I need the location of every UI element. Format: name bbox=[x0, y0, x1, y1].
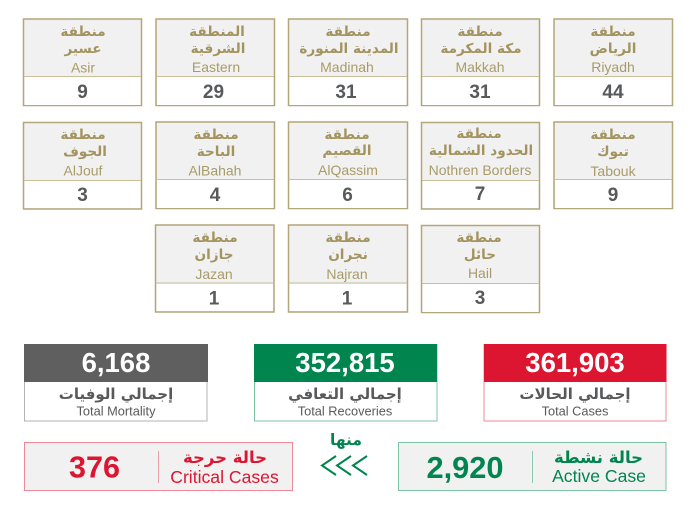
card: Makkah: Makkah bbox=[455, 59, 505, 75]
card: Tabouk bbox=[554, 122, 672, 208]
card: Makkah: مكة المكرمة bbox=[440, 41, 522, 57]
card: Tabouk: Tabouk bbox=[590, 163, 637, 179]
card: Madinah: 31 bbox=[335, 82, 357, 103]
card: Madinah: المدينة المنورة bbox=[299, 41, 399, 57]
card: AlQassim: القصيم bbox=[322, 143, 372, 159]
card: Jazan: 1 bbox=[209, 288, 220, 310]
card: Madinah bbox=[288, 19, 408, 106]
panel: total mortality: Total Mortality bbox=[77, 404, 156, 418]
card: Tabouk: منطقة bbox=[590, 127, 636, 143]
card: Riyadh: 44 bbox=[602, 82, 624, 103]
card: AlQassim: 6 bbox=[342, 185, 353, 206]
card: Asir: 9 bbox=[77, 82, 88, 103]
card: Jazan: Jazan bbox=[195, 266, 233, 282]
card: Hail: منطقة bbox=[456, 230, 502, 246]
card: Nothren Borders: Nothren Borders bbox=[429, 162, 531, 178]
card: Asir: عسير bbox=[63, 41, 102, 57]
panel: total recoveries: Total Recoveries bbox=[298, 404, 392, 418]
card: Riyadh: منطقة bbox=[590, 24, 636, 40]
card: AlQassim: منطقة bbox=[324, 127, 370, 143]
label: of which: منها bbox=[330, 431, 362, 449]
panel: total mortality: إجمالي الوفيات bbox=[59, 385, 173, 403]
card: Nothren Borders: 7 bbox=[475, 184, 485, 205]
card: AlJouf: الجوف bbox=[63, 144, 107, 160]
card: Makkah: منطقة bbox=[457, 24, 503, 40]
panel: total cases bbox=[484, 344, 666, 421]
card: AlQassim: AlQassim bbox=[318, 162, 378, 178]
card: AlBahah: 4 bbox=[210, 185, 221, 206]
panel: active case: Active Case bbox=[552, 466, 646, 486]
card: Asir: منطقة bbox=[60, 24, 106, 40]
card: Tabouk: تبوك bbox=[597, 144, 629, 160]
card: Najran: 1 bbox=[342, 288, 353, 310]
card: Madinah: منطقة bbox=[325, 24, 371, 40]
card: Nothren Borders: الحدود الشمالية bbox=[429, 143, 533, 159]
card: Asir: Asir bbox=[71, 60, 95, 76]
card: Najran bbox=[288, 225, 408, 312]
panel: total cases: 361,903 bbox=[525, 347, 625, 378]
card: Riyadh bbox=[554, 19, 672, 106]
card: Hail: Hail bbox=[468, 265, 492, 281]
card: Eastern: المنطقة bbox=[189, 24, 245, 40]
card: Riyadh: الرياض bbox=[590, 41, 636, 57]
card: Eastern: 29 bbox=[203, 82, 224, 103]
card: AlBahah bbox=[156, 122, 274, 208]
panel: total cases: Total Cases bbox=[542, 404, 608, 418]
card: Hail: حائل bbox=[464, 247, 496, 263]
card: Nothren Borders bbox=[422, 122, 540, 209]
card: Hail: 3 bbox=[475, 288, 485, 309]
card: Riyadh: Riyadh bbox=[591, 59, 635, 75]
panel: critical cases: 376 bbox=[69, 450, 120, 484]
card: AlJouf bbox=[24, 122, 142, 209]
panel: active case bbox=[398, 442, 666, 490]
card: Jazan bbox=[156, 225, 274, 312]
panel: critical cases bbox=[24, 442, 292, 490]
panel: total cases: إجمالي الحالات bbox=[519, 385, 631, 403]
panel: total recoveries: 352,815 bbox=[295, 347, 395, 378]
card: AlJouf: AlJouf bbox=[64, 162, 103, 178]
panel: total mortality bbox=[24, 344, 208, 421]
card: Eastern: Eastern bbox=[192, 59, 240, 75]
card: Jazan: منطقة bbox=[192, 230, 238, 246]
panel: active case: حالة نشطة bbox=[554, 448, 643, 467]
panel: total recoveries bbox=[254, 344, 437, 421]
card: AlBahah: الباحة bbox=[197, 144, 235, 160]
card: Najran: منطقة bbox=[325, 230, 371, 246]
panel: critical cases: Critical Cases bbox=[170, 467, 279, 487]
card: Asir bbox=[24, 19, 142, 106]
card: AlQassim bbox=[288, 122, 408, 208]
panel: critical cases: حالة حرجة bbox=[183, 448, 267, 468]
card: Eastern bbox=[156, 19, 274, 106]
panel: total recoveries: إجمالي التعافي bbox=[288, 385, 402, 403]
card: Tabouk: 9 bbox=[608, 185, 618, 206]
card: Hail bbox=[422, 226, 540, 312]
card: Najran: Najran bbox=[326, 266, 368, 282]
card: Jazan: جازان bbox=[194, 247, 234, 263]
card: AlJouf: 3 bbox=[77, 185, 88, 206]
card: Najran: نجران bbox=[328, 247, 368, 263]
card: AlBahah: منطقة bbox=[193, 127, 239, 143]
panel: active case: 2,920 bbox=[426, 450, 504, 485]
icon: chevrons bbox=[322, 456, 367, 475]
card: AlBahah: AlBahah bbox=[189, 162, 241, 178]
card: Eastern: الشرقية bbox=[191, 41, 245, 57]
card: Nothren Borders: منطقة bbox=[456, 126, 502, 142]
card: AlJouf: منطقة bbox=[60, 127, 106, 143]
card: Makkah: 31 bbox=[469, 82, 491, 103]
card: Madinah: Madinah bbox=[320, 59, 374, 75]
panel: total mortality: 6,168 bbox=[82, 347, 150, 378]
card: Makkah bbox=[422, 19, 540, 106]
